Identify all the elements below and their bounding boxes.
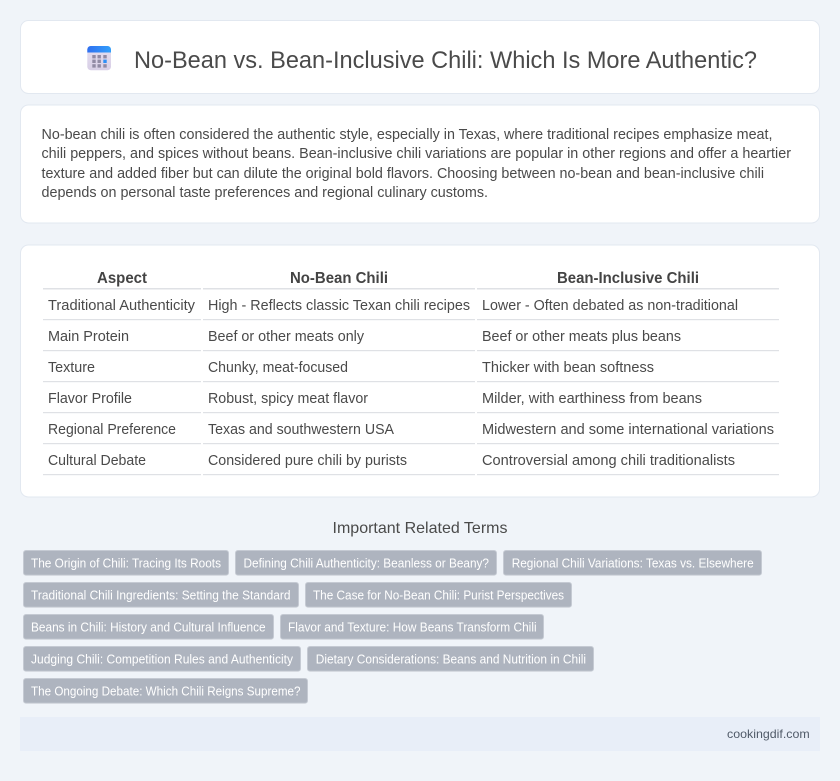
tag: Defining Chili Authenticity: Beanless or Beany? <box>244 556 489 570</box>
table header row: Bean-Inclusive Chili <box>557 270 699 287</box>
footer <box>20 717 820 751</box>
intro text block: chili peppers, and spices without beans. Bean-inclusive chili variations are popular in other regions and offer a heartier <box>42 146 791 162</box>
tag: Flavor and Texture: How Beans Transform Chili <box>288 620 537 634</box>
tag <box>24 582 298 607</box>
footer source text: cookingdif.com <box>727 727 810 741</box>
tag <box>280 614 544 639</box>
tag <box>24 550 228 575</box>
tag <box>24 614 274 639</box>
icon: calendar <box>87 46 111 70</box>
table rules <box>43 288 779 475</box>
tag <box>236 550 496 575</box>
table header row: No-Bean Chili <box>290 270 388 287</box>
row: traditional authenticity <box>48 298 738 314</box>
panel: comparison table <box>20 245 820 497</box>
header panel <box>20 20 820 94</box>
tag: Dietary Considerations: Beans and Nutrition in Chili <box>316 652 586 666</box>
row: regional preference: Regional Preference <box>48 422 176 438</box>
row: regional preference: Midwestern and some international variations <box>482 422 774 438</box>
row: traditional authenticity: High - Reflects classic Texan chili recipes <box>208 298 470 314</box>
table header row: Aspect <box>97 270 148 287</box>
tag: The Ongoing Debate: Which Chili Reigns Supreme? <box>31 684 300 698</box>
intro text block <box>42 127 791 201</box>
row: traditional authenticity: Traditional Authenticity <box>48 298 196 314</box>
row: flavor profile: Flavor Profile <box>48 391 132 407</box>
row: cultural debate: Considered pure chili by purists <box>208 453 407 469</box>
row: texture: Texture <box>48 360 95 376</box>
tag <box>24 646 300 671</box>
row: cultural debate: Cultural Debate <box>48 453 146 469</box>
tag: The Case for No-Bean Chili: Purist Perspectives <box>313 588 564 602</box>
row: main protein <box>48 329 681 345</box>
panel: related term tags <box>24 550 762 703</box>
tag: Beans in Chili: History and Cultural Influence <box>31 620 266 634</box>
tag <box>504 550 762 575</box>
panel: introduction <box>20 105 820 223</box>
tag <box>24 678 308 703</box>
row: texture <box>48 360 654 376</box>
tag: The Origin of Chili: Tracing Its Roots <box>31 556 221 570</box>
tag: Regional Chili Variations: Texas vs. Elsewhere <box>512 556 754 570</box>
table header row <box>97 270 699 287</box>
intro text block: No-bean chili is often considered the authentic style, especially in Texas, where traditional recipes emphasize meat, <box>42 127 772 143</box>
heading: important related terms: Important Related Terms <box>332 520 508 537</box>
tag <box>308 646 594 671</box>
row: texture: Chunky, meat-focused <box>208 360 348 376</box>
title: No-Bean vs. Bean-Inclusive Chili: Which Is More Authentic? <box>134 47 757 74</box>
tag <box>306 582 572 607</box>
row: cultural debate: Controversial among chili traditionalists <box>482 453 735 469</box>
intro text block: texture and added fiber but can dilute the original bold flavors. Choosing between no-bean and bean-inclusive chili <box>42 166 764 182</box>
row: texture: Thicker with bean softness <box>482 360 654 376</box>
row: traditional authenticity: Lower - Often debated as non-traditional <box>482 298 738 314</box>
row: regional preference <box>48 422 774 438</box>
row: main protein: Beef or other meats plus beans <box>482 329 681 345</box>
row: main protein: Main Protein <box>48 329 129 345</box>
row: flavor profile: Robust, spicy meat flavor <box>208 391 368 407</box>
intro text block: depends on personal taste preferences and regional culinary customs. <box>42 185 488 201</box>
row: flavor profile <box>48 391 702 407</box>
row: main protein: Beef or other meats only <box>208 329 365 345</box>
row: regional preference: Texas and southwestern USA <box>208 422 394 438</box>
row: flavor profile: Milder, with earthiness from beans <box>482 391 702 407</box>
tag: Traditional Chili Ingredients: Setting the Standard <box>31 588 290 602</box>
row: cultural debate <box>48 453 735 469</box>
tag: Judging Chili: Competition Rules and Authenticity <box>31 652 294 666</box>
